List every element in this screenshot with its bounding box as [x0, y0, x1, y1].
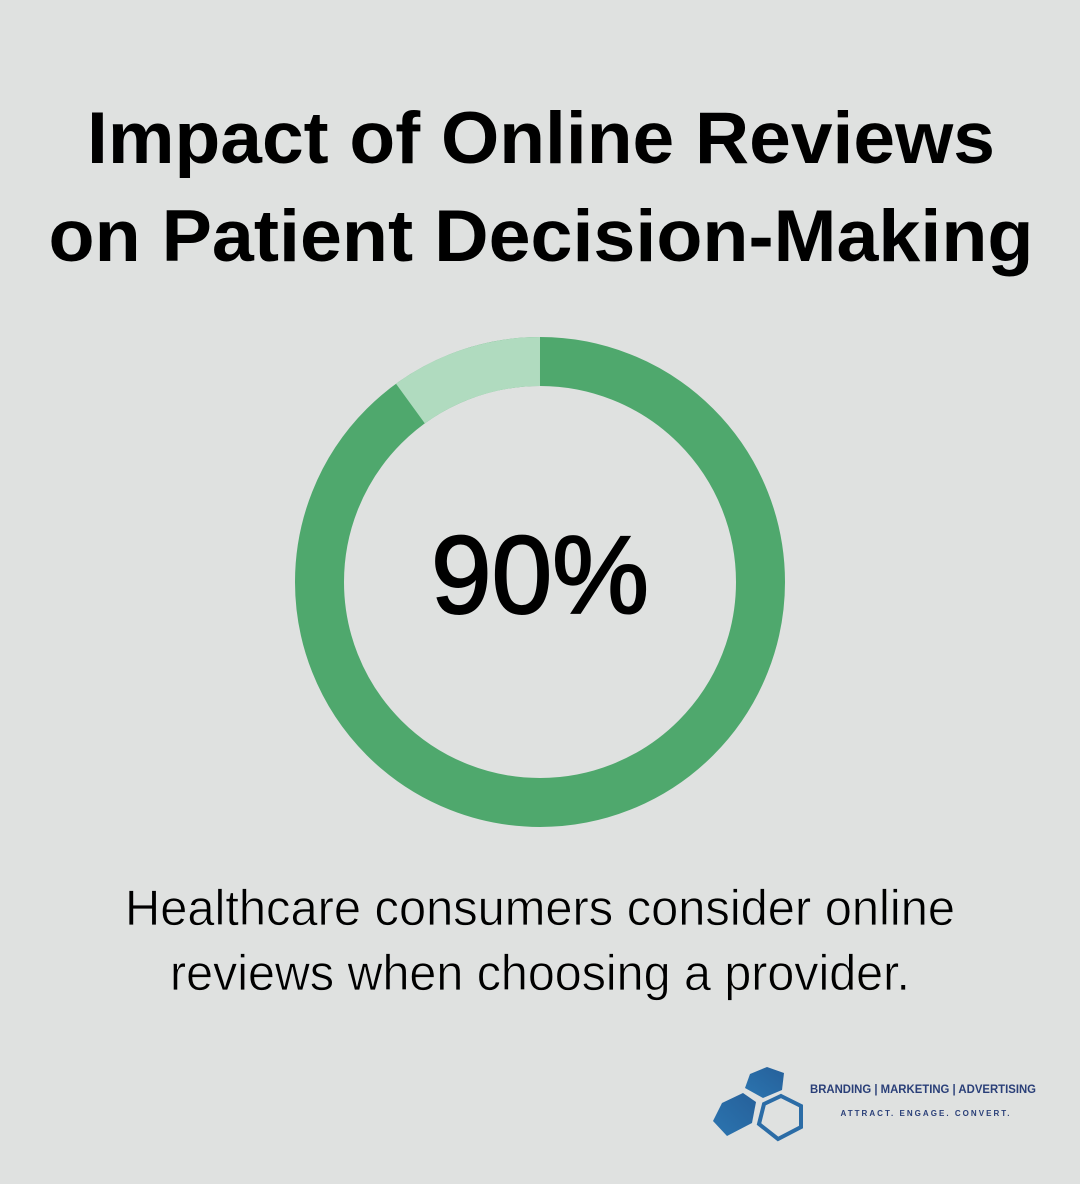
logo tagline: motto: ATTRACT. ENGAGE. CONVERT.: [840, 1109, 1010, 1118]
description text: reviews when choosing a provider.: [170, 945, 910, 1001]
title: on Patient Decision-Making: [48, 196, 1034, 277]
big number: 90%: 90%: [431, 514, 649, 637]
description text: [125, 880, 955, 1001]
description text: Healthcare consumers consider online: [125, 880, 955, 936]
logo tagline: services: BRANDING | MARKETING | ADVERTISING: [810, 1084, 1036, 1096]
title: Impact of Online Reviews: [87, 98, 995, 179]
donut chart: 90%: [320, 361, 760, 802]
icon: hexagons: [713, 1067, 801, 1139]
remaining 10% segment: [410, 361, 540, 404]
logo: [713, 1067, 1036, 1139]
title: [48, 98, 1034, 277]
